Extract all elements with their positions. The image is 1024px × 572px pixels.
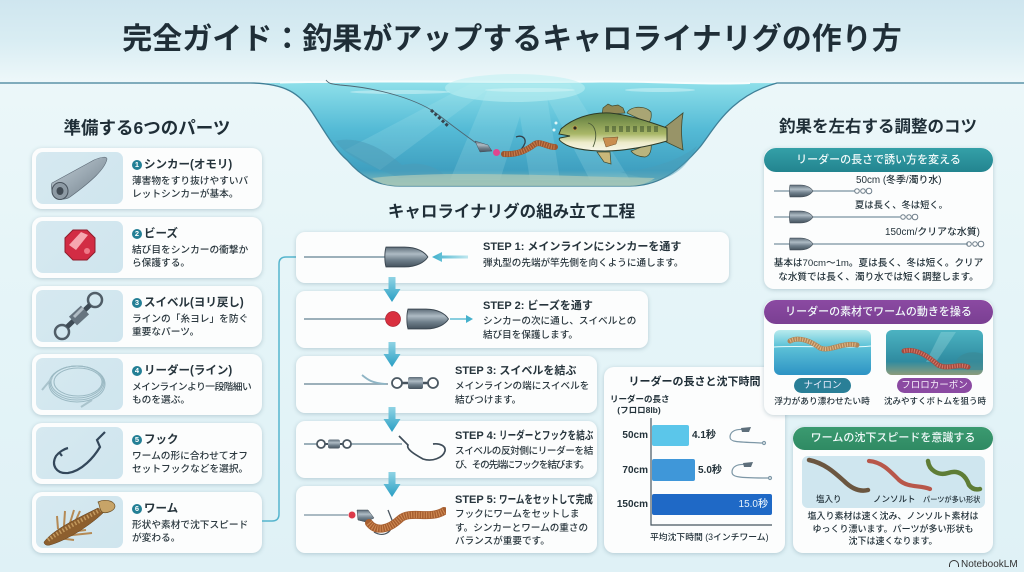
panel header: リーダーの素材でワームの動きを操る (785, 306, 972, 318)
bar chart: 50cm (622, 430, 648, 441)
part 2: beads: ら保護する。 (132, 258, 190, 269)
bar chart: 15.0秒 (739, 499, 768, 510)
step 1 (296, 232, 729, 283)
part 6: worm: ワーム (144, 503, 178, 515)
part 1: sinker: レットシンカーが基本。 (132, 189, 239, 200)
connector from parts to steps (262, 256, 296, 522)
panel header (793, 427, 993, 450)
part 5: hook (32, 423, 262, 484)
heading: six parts: 準備する6つのパーツ (64, 118, 230, 138)
x axis title: 平均沈下時間 (3インチワーム) (650, 532, 768, 542)
y axis title: (フロロ8lb) (617, 405, 661, 415)
step 5: ワームをセットして完成 (499, 494, 593, 506)
fluorocarbon image (886, 330, 983, 375)
part 2: beads: ビーズ (144, 228, 178, 240)
part 4: leader: メインラインより一段階細い (132, 382, 251, 393)
step 2 diagram (304, 308, 473, 330)
step 4: リーダーとフックを結ぶ (499, 430, 594, 442)
part 1: sinker: シンカー(オモリ) (144, 159, 232, 171)
icon: creature worm (36, 496, 123, 548)
part 6: worm: が変わる。 (132, 533, 180, 544)
step 3: メインラインの端にスイベルを (455, 381, 589, 392)
panel header (764, 148, 993, 172)
step 1: STEP 1: メインラインにシンカーを通す (483, 241, 681, 253)
step 4: び、その先端にフックを結びます。 (455, 460, 588, 470)
part 4: leader (32, 354, 262, 415)
nylon pill: ナイロン (803, 380, 842, 391)
fishing rig (326, 80, 555, 156)
largemouth bass (552, 104, 683, 164)
worm sink note: 塩入り素材は速く沈み、ノンソルト素材は (807, 511, 978, 521)
step 5 diagram (304, 507, 446, 535)
fluorocarbon pill (897, 378, 972, 393)
step 1 diagram (304, 246, 468, 268)
panel header: ワームの沈下スピードを意識する (811, 432, 975, 444)
part 6: worm (32, 492, 262, 553)
step 5: バランスが重要です。 (455, 536, 550, 547)
icon: leader coil (36, 358, 123, 410)
step 3: STEP 3: スイベルを結ぶ (455, 365, 576, 377)
water illustration with rig and bass (0, 74, 1024, 187)
panel: leader material (764, 300, 993, 415)
leader length note: な水質では長く、濁り水では短く調整します。 (778, 272, 979, 283)
leader length note: 基本は70cm〜1m。夏は長く、冬は短く。クリア (774, 258, 983, 269)
step 3 (296, 356, 597, 413)
part 2: beads: 2 (135, 229, 139, 238)
step 3: 結びつけます。 (455, 394, 521, 406)
fluorocarbon pill: フロロカーボン (901, 380, 968, 391)
part 3: swivel: 3 (135, 298, 139, 307)
part 6: worm: 6 (135, 504, 139, 513)
nylon caption: 浮力があり漂わせたい時 (774, 396, 870, 406)
bar chart: 5.0秒 (698, 465, 722, 476)
heading: assembly process: キャロライナリグの組み立て工程 (388, 203, 635, 221)
leader length note (774, 258, 983, 283)
part 5: hook: フック (144, 434, 178, 446)
step 2: 結び目を保護します。 (483, 330, 578, 340)
title banner (0, 0, 1024, 83)
icon: swivel (36, 290, 123, 342)
icon: offset hook (36, 427, 123, 479)
part 2: beads (32, 217, 262, 278)
part 4: leader: 4 (135, 366, 139, 375)
part 4: leader: ものを選ぶ。 (132, 395, 190, 406)
panel: leader length: 50cm (冬季/濁り水) (856, 175, 942, 186)
part 4: leader: リーダー(ライン) (144, 365, 232, 377)
chart title: リーダーの長さと沈下時間 (628, 376, 760, 388)
part 5: hook: ワームの形に合わせてオフ (132, 451, 248, 462)
panel header (764, 300, 993, 324)
panel header: リーダーの長さで誘い方を変える (796, 154, 961, 166)
step 5 (296, 486, 597, 553)
worm comparison image: パーツが多い形状 (923, 495, 980, 504)
worm comparison image (802, 456, 985, 508)
step 2: シンカーの次に通し、スイベルとの (483, 316, 636, 327)
step 2: STEP 2: ビーズを通す (483, 300, 593, 312)
step 4: STEP 4: (455, 430, 496, 442)
bar chart: 150cm (617, 499, 648, 510)
panel: leader length: 夏は長く、冬は短く。 (855, 200, 948, 210)
bar chart: 70cm (622, 465, 648, 476)
y axis title (610, 394, 670, 415)
step 1: 弾丸型の先端が竿先側を向くように通します。 (483, 258, 684, 269)
step 5: STEP 5: (455, 494, 496, 506)
part 5: hook: 5 (135, 435, 139, 444)
step 4: スイベルの反対側にリーダーを結 (455, 446, 593, 457)
panel: worm sink speed (793, 427, 993, 553)
part 3: swivel: 重要なパーツ。 (132, 327, 199, 338)
bar chart: 4.1秒 (692, 430, 716, 441)
part 3: swivel: スイベル(ヨリ戻し) (144, 297, 244, 309)
icon: bullet sinker (36, 152, 123, 204)
panel: leader length vs sink time chart (604, 367, 785, 553)
arrows between steps (384, 277, 400, 497)
step 4 diagram (304, 435, 446, 461)
fluorocarbon caption: 沈みやすくボトムを狙う時 (884, 396, 986, 406)
worm sink note: 沈下は速くなります。 (848, 536, 938, 546)
step 5: フックにワームをセットしま (455, 509, 579, 520)
panel: leader length (764, 148, 993, 289)
worm sink note: ゆっくり漂います。パーツが多い形状も (813, 524, 973, 534)
part 5: hook: セットフックなどを選択。 (132, 464, 248, 475)
heading: tips: 釣果を左右する調整のコツ (779, 118, 977, 136)
icon: red bead (36, 221, 123, 273)
part 1: sinker (32, 148, 262, 209)
nylon pill (794, 378, 851, 393)
step 3 diagram (304, 374, 439, 389)
leader length diagram (774, 184, 984, 250)
worm comparison image: 塩入り (816, 494, 842, 504)
part 3: swivel (32, 286, 262, 347)
step 2 (296, 291, 648, 348)
part 1: sinker: 1 (135, 160, 139, 169)
part 1: sinker: 薄害物をすり抜けやすいバ (132, 176, 248, 187)
NotebookLM logo: NotebookLM (961, 559, 1018, 570)
nylon image (774, 330, 871, 375)
part 2: beads: 結び目をシンカーの衝撃か (132, 245, 248, 256)
panel: leader length: 150cm/クリアな水質) (885, 227, 980, 238)
step 4 (296, 421, 597, 478)
title: 完全ガイド：釣果がアップするキャロライナリグの作り方 (122, 23, 902, 56)
part 6: worm: 形状や素材で沈下スピード (132, 520, 248, 531)
part 3: swivel: ラインの「糸ヨレ」を防ぐ (132, 314, 248, 325)
bar chart (617, 418, 772, 526)
worm comparison image: ノンソルト (873, 494, 916, 504)
step 5: す。シンカーとワームの重さの (455, 522, 588, 534)
worm sink note (807, 511, 978, 546)
y axis title: リーダーの長さ (610, 394, 670, 404)
